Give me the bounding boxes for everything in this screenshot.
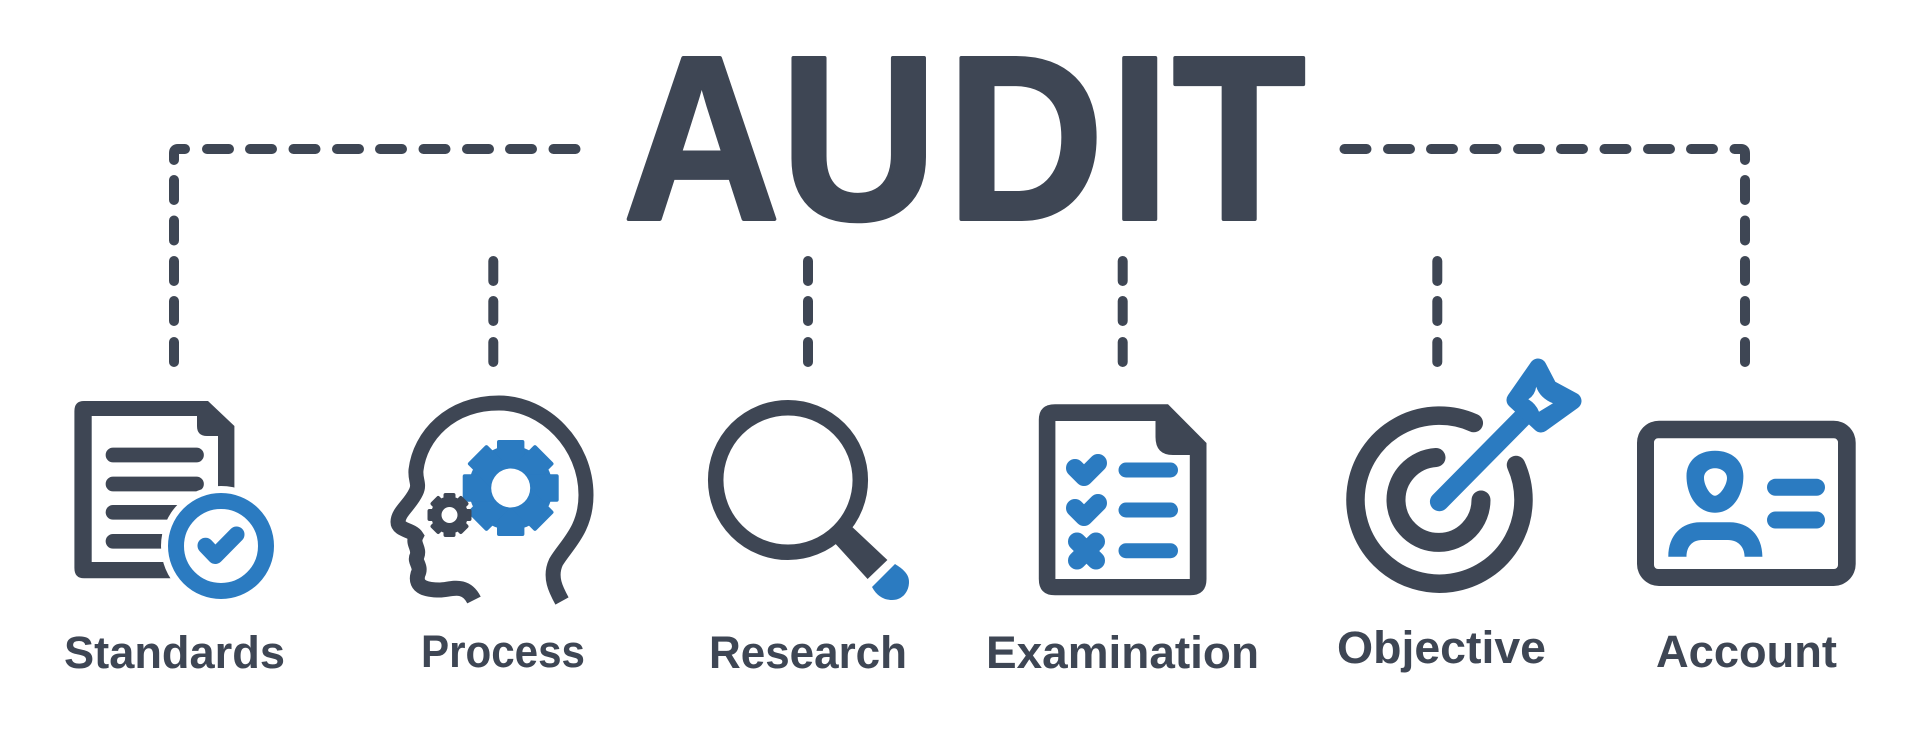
list lines bbox=[1126, 470, 1170, 551]
target rings bbox=[1355, 416, 1523, 584]
dashed connector: Examination bbox=[1118, 261, 1128, 362]
dashed connector: Research bbox=[803, 261, 813, 362]
card frame bbox=[1637, 421, 1856, 586]
icon: account ID card bbox=[1637, 421, 1856, 586]
check marks bbox=[1075, 463, 1098, 517]
icon: process head with gears bbox=[398, 403, 586, 601]
document text lines bbox=[113, 455, 196, 541]
lens ring bbox=[716, 408, 860, 552]
person shoulders bbox=[1668, 522, 1762, 557]
icon: research magnifier bbox=[716, 408, 909, 600]
person head bbox=[1686, 451, 1743, 513]
dashed connector: Process bbox=[488, 261, 498, 362]
detail lines bbox=[1776, 487, 1816, 520]
head outline bbox=[398, 403, 586, 601]
label: Process: Process bbox=[421, 626, 585, 677]
blue handle tip bbox=[872, 564, 909, 600]
label: Examination: Examination bbox=[986, 627, 1259, 678]
icon: examination checklist bbox=[1039, 404, 1206, 595]
document sheet bbox=[74, 401, 234, 578]
arrow shaft bbox=[1439, 415, 1525, 502]
small dark gear bbox=[428, 493, 472, 537]
label: Standards: Standards bbox=[64, 627, 285, 678]
dashed connector: Objective bbox=[1432, 261, 1442, 362]
large blue gear bbox=[463, 440, 559, 536]
dashed connector: right bracket to Account bbox=[1344, 149, 1745, 362]
label: Objective: Objective bbox=[1337, 622, 1546, 673]
title: AUDIT: AUDIT bbox=[623, 7, 1306, 269]
arrow fletching bbox=[1515, 367, 1573, 424]
label: Account: Account bbox=[1656, 626, 1837, 677]
document sheet bbox=[1039, 404, 1206, 595]
label: Research: Research bbox=[709, 627, 907, 678]
icon: objective target with arrow bbox=[1355, 367, 1573, 584]
icon: standards document with check badge bbox=[74, 401, 281, 606]
handle bbox=[832, 523, 887, 579]
check badge bbox=[161, 486, 281, 606]
dashed connector: left bracket to Standards bbox=[174, 149, 576, 362]
cross mark bbox=[1077, 542, 1096, 560]
